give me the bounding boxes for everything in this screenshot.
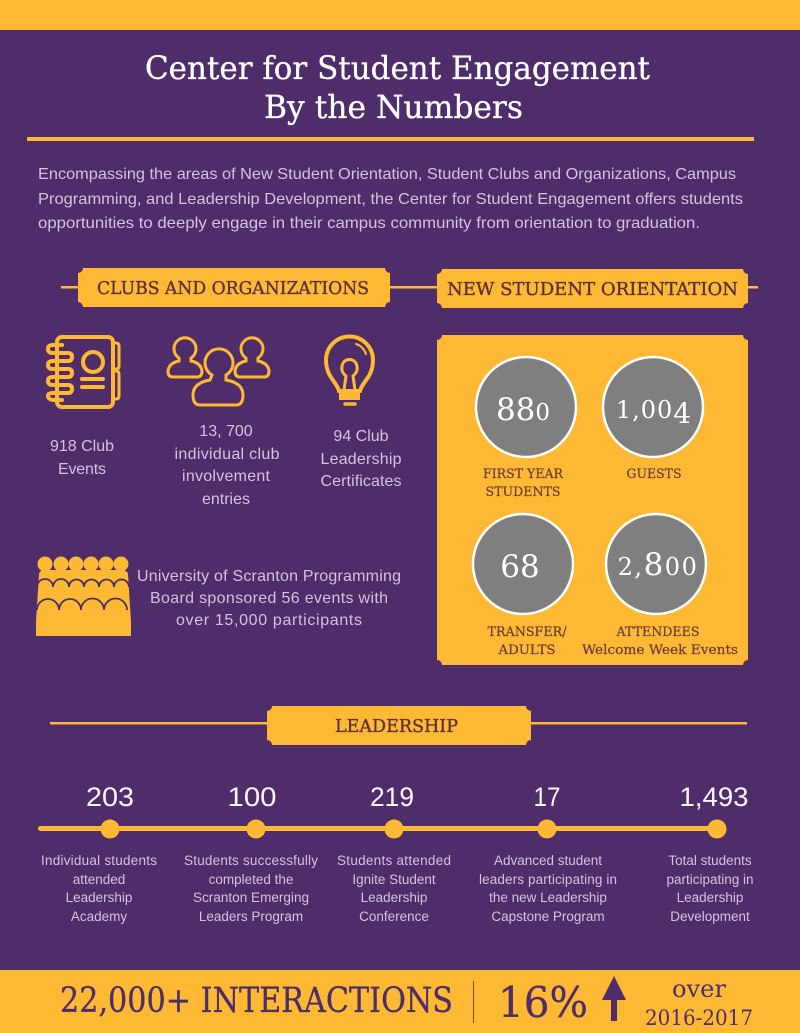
panel: new student orientation (437, 335, 748, 665)
stat: 68 transfer adults (473, 514, 573, 658)
stat: 219 conference: 219 (370, 782, 414, 812)
caption: involvement entries: entries (202, 491, 250, 508)
bottom banner (0, 970, 800, 1033)
stat: 17 capstone: the new Leadership (489, 890, 607, 905)
icon: group of people (168, 338, 269, 405)
heading: clubs and organizations: CLUBS AND ORGANIZATIONS (97, 278, 369, 299)
stat: 100 emerging leaders: Scranton Emerging (193, 890, 309, 905)
stat: 880 first year students: STUDENTS (486, 485, 560, 500)
caption: leadership certificates: Leadership (320, 451, 402, 468)
caption: involvement entries: involvement (182, 468, 271, 485)
stat: 219 conference: Students attended (337, 853, 451, 868)
stat: 68 transfer adults: 68 (500, 549, 540, 585)
intro paragraph: Encompassing the areas of New Student Orientation, Student Clubs and Organizations, Campus (38, 166, 736, 183)
stat: 2,800 attendees: ATTENDEES (616, 625, 700, 640)
caption: leadership certificates: 94 Club (333, 428, 389, 445)
caption: club events: 918 Club (50, 438, 114, 455)
stat: 203 academy: attended (73, 872, 125, 887)
heading: new student orientation: NEW STUDENT ORIENTATION (447, 279, 738, 300)
intro paragraph: Programming, and Leadership Development, the Center for Student Engagement offers students (38, 191, 743, 208)
stat: 1,493 total: 1,493 (680, 782, 748, 812)
growth percent: 16% (498, 978, 588, 1027)
caption: leadership certificates: Certificates (320, 473, 402, 490)
stat: 1,493 total: Total students (668, 853, 752, 868)
title: By the Numbers (264, 88, 523, 126)
stat: 203 academy: 203 (86, 782, 134, 812)
interactions total: 22,000+ INTERACTIONS (60, 981, 453, 1021)
stat: 68 transfer adults: TRANSFER/ (488, 625, 567, 640)
heading: new student orientation (437, 269, 748, 308)
heading: leadership: LEADERSHIP (335, 716, 458, 737)
stat: 219 conference: Conference (359, 909, 429, 924)
stat: 1,004 guests: 1,00 (616, 396, 673, 424)
stat: 880 first year students: FIRST YEAR (483, 467, 564, 482)
stat: 100 emerging leaders: 100 (228, 782, 276, 812)
stat: 1,493 total: participating in (666, 872, 754, 887)
caption: involvement entries: individual club (174, 446, 280, 463)
stat: 1,004 guests: GUESTS (626, 467, 682, 482)
stat: 1,004 guests: 4 (673, 397, 692, 430)
stat: 17 capstone: leaders participating in (479, 872, 617, 887)
stat: 203 academy: Individual students (41, 853, 157, 868)
stat: 68 transfer adults: ADULTS (497, 643, 556, 658)
caption: club events: Events (58, 461, 106, 478)
text: programming board (137, 568, 401, 629)
stat: 17 capstone: Capstone Program (491, 909, 605, 924)
period: 2016-2017 (645, 1006, 753, 1030)
text: programming board: Board sponsored 56 events with (150, 590, 388, 607)
caption: involvement entries: 13, 700 (199, 423, 253, 440)
stat: 880 first year students (476, 357, 576, 500)
stat: 219 conference: Ignite Student (352, 872, 436, 887)
stat: 219 conference: Leadership (361, 890, 427, 905)
stat: 203 academy: Academy (71, 909, 127, 924)
stat: 2,800 attendees (582, 514, 738, 658)
text: programming board: over 15,000 participants (176, 612, 362, 629)
top gold band (0, 0, 800, 30)
title (145, 49, 650, 126)
stat: 1,493 total: Development (670, 909, 750, 924)
heading: leadership (267, 706, 531, 745)
icon: crowd (36, 556, 131, 636)
stat: 219 conference (337, 782, 451, 924)
stat: 203 academy (41, 782, 157, 924)
stat: 1,493 total (666, 782, 754, 924)
icon: light bulb (326, 336, 373, 404)
stat: 203 academy: Leadership (66, 890, 132, 905)
stat: 17 capstone (479, 782, 617, 924)
text: programming board: University of Scranton Programming (137, 568, 401, 585)
title: Center for Student Engagement (145, 49, 650, 87)
intro paragraph (38, 166, 743, 232)
stat: 100 emerging leaders: Students successfully (184, 853, 318, 868)
stat: 880 first year students: 880 (496, 392, 550, 428)
heading: clubs and organizations (78, 268, 390, 307)
stat: 100 emerging leaders: Leaders Program (199, 909, 303, 924)
stat: 2,800 attendees: Welcome Week Events (582, 643, 738, 658)
stat: 17 capstone: 17 (534, 782, 560, 812)
intro paragraph: opportunities to deeply engage in their campus community from orientation to graduation. (38, 215, 700, 232)
stat: 100 emerging leaders (184, 782, 318, 924)
timeline (38, 820, 726, 838)
stat: 100 emerging leaders: completed the (209, 872, 293, 887)
stat: 2,800 attendees: 2,800 (618, 547, 698, 583)
period (645, 975, 753, 1030)
stat: 1,493 total: Leadership (677, 890, 743, 905)
icon: address book (48, 337, 119, 407)
stat: 1,004 guests (603, 357, 703, 482)
caption: involvement entries (174, 423, 280, 508)
icon: up arrow (602, 976, 626, 1021)
period: over (672, 975, 727, 1003)
caption: club events (50, 438, 114, 478)
caption: leadership certificates (320, 428, 402, 490)
stat: 17 capstone: Advanced student (494, 853, 602, 868)
